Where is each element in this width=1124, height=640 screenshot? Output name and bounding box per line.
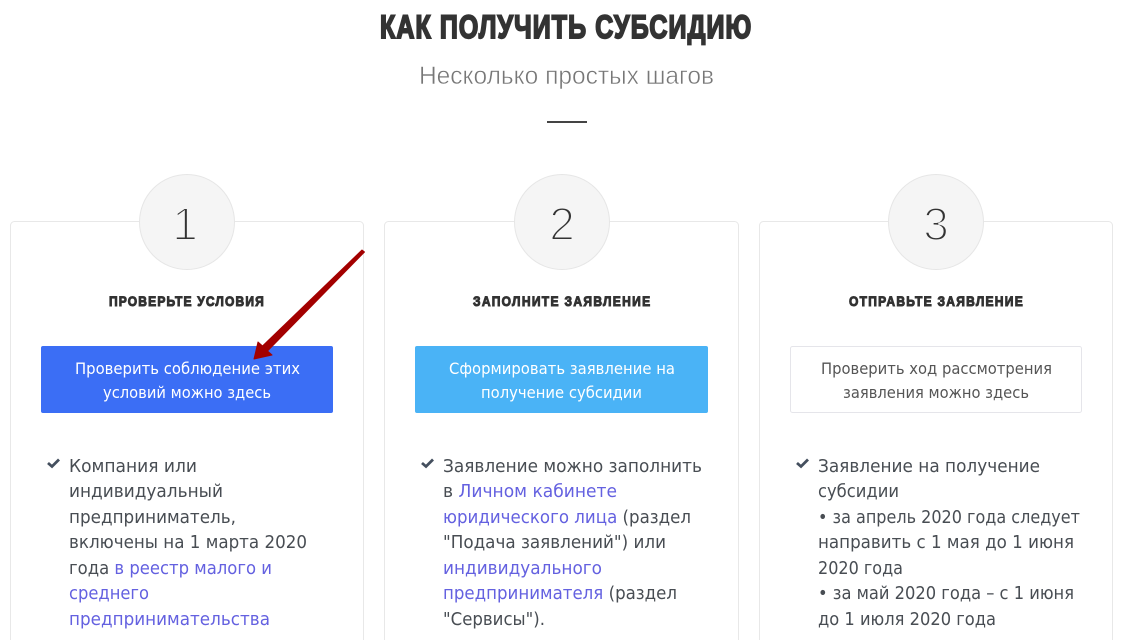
text block: step 2: индивидуального — [443, 558, 602, 579]
text block: step 3: • за май 2020 года – с 1 июня — [818, 583, 1074, 604]
text block: step 3: направить с 1 мая до 1 июня — [818, 532, 1074, 553]
text block: step 1: среднего — [69, 583, 149, 604]
step number 3 — [888, 174, 984, 270]
step number 1: 1 — [172, 198, 198, 250]
icon: check 1 — [48, 460, 59, 466]
button: check status — [790, 346, 1082, 412]
button: check status: Проверить ход рассмотрения — [821, 359, 1052, 378]
text block: step 3: 2020 года — [818, 558, 903, 579]
heading: step 1: ПРОВЕРЬТЕ УСЛОВИЯ — [109, 293, 264, 309]
arrow — [254, 250, 364, 359]
text block: step 3: субсидии — [818, 481, 899, 502]
text block: step 2: "Сервисы"). — [443, 609, 545, 630]
panel: step 1 — [10, 174, 364, 640]
text block: step 3: до 1 июля 2020 года — [818, 609, 996, 630]
subtitle: Несколько простых шагов — [419, 62, 714, 90]
text block: step 2: "Подача заявлений") или — [443, 532, 666, 553]
text block: step 1: предприниматель, — [69, 507, 236, 528]
button: form application — [415, 346, 708, 413]
button: form application: получение субсидии — [481, 383, 642, 402]
text block: step 1 — [69, 456, 307, 630]
title: КАК ПОЛУЧИТЬ СУБСИДИЮ — [380, 10, 751, 46]
text block: step 3 — [818, 456, 1080, 630]
heading: step 2: ЗАПОЛНИТЕ ЗАЯВЛЕНИЕ — [473, 293, 650, 309]
button: check conditions: Проверить соблюдение этих — [75, 359, 300, 378]
text block: step 1: индивидуальный — [69, 481, 223, 502]
text block: step 2: юридического лица (раздел — [443, 507, 691, 528]
button: check conditions: условий можно здесь — [103, 383, 271, 402]
step number 2: 2 — [549, 198, 575, 250]
icon: check 3 — [797, 460, 808, 466]
icon: check 2 — [422, 460, 433, 466]
step number 1 — [140, 174, 234, 270]
step number 2 — [514, 174, 610, 270]
step number 3: 3 — [923, 198, 949, 250]
text block: step 3: Заявление на получение — [818, 456, 1040, 477]
panel: step 3 — [760, 174, 1112, 640]
panel: step 2 — [384, 174, 738, 640]
text block: step 1: включены на 1 марта 2020 — [69, 532, 307, 553]
text block: step 1: года в реестр малого и — [69, 558, 272, 579]
heading: step 3: ОТПРАВЬТЕ ЗАЯВЛЕНИЕ — [849, 293, 1023, 309]
text block: step 2: предпринимателя (раздел — [443, 583, 677, 604]
text block: step 2: в Личном кабинете — [443, 481, 617, 502]
text block: step 1: предпринимательства — [69, 609, 270, 630]
button: check status: заявления можно здесь — [843, 383, 1029, 402]
button: check conditions — [41, 346, 333, 413]
text block: step 2 — [443, 456, 702, 630]
button: form application: Сформировать заявление на — [449, 359, 675, 378]
text block: step 3: • за апрель 2020 года следует — [818, 507, 1080, 528]
text block: step 2: Заявление можно заполнить — [443, 456, 702, 477]
text block: step 1: Компания или — [69, 456, 197, 477]
